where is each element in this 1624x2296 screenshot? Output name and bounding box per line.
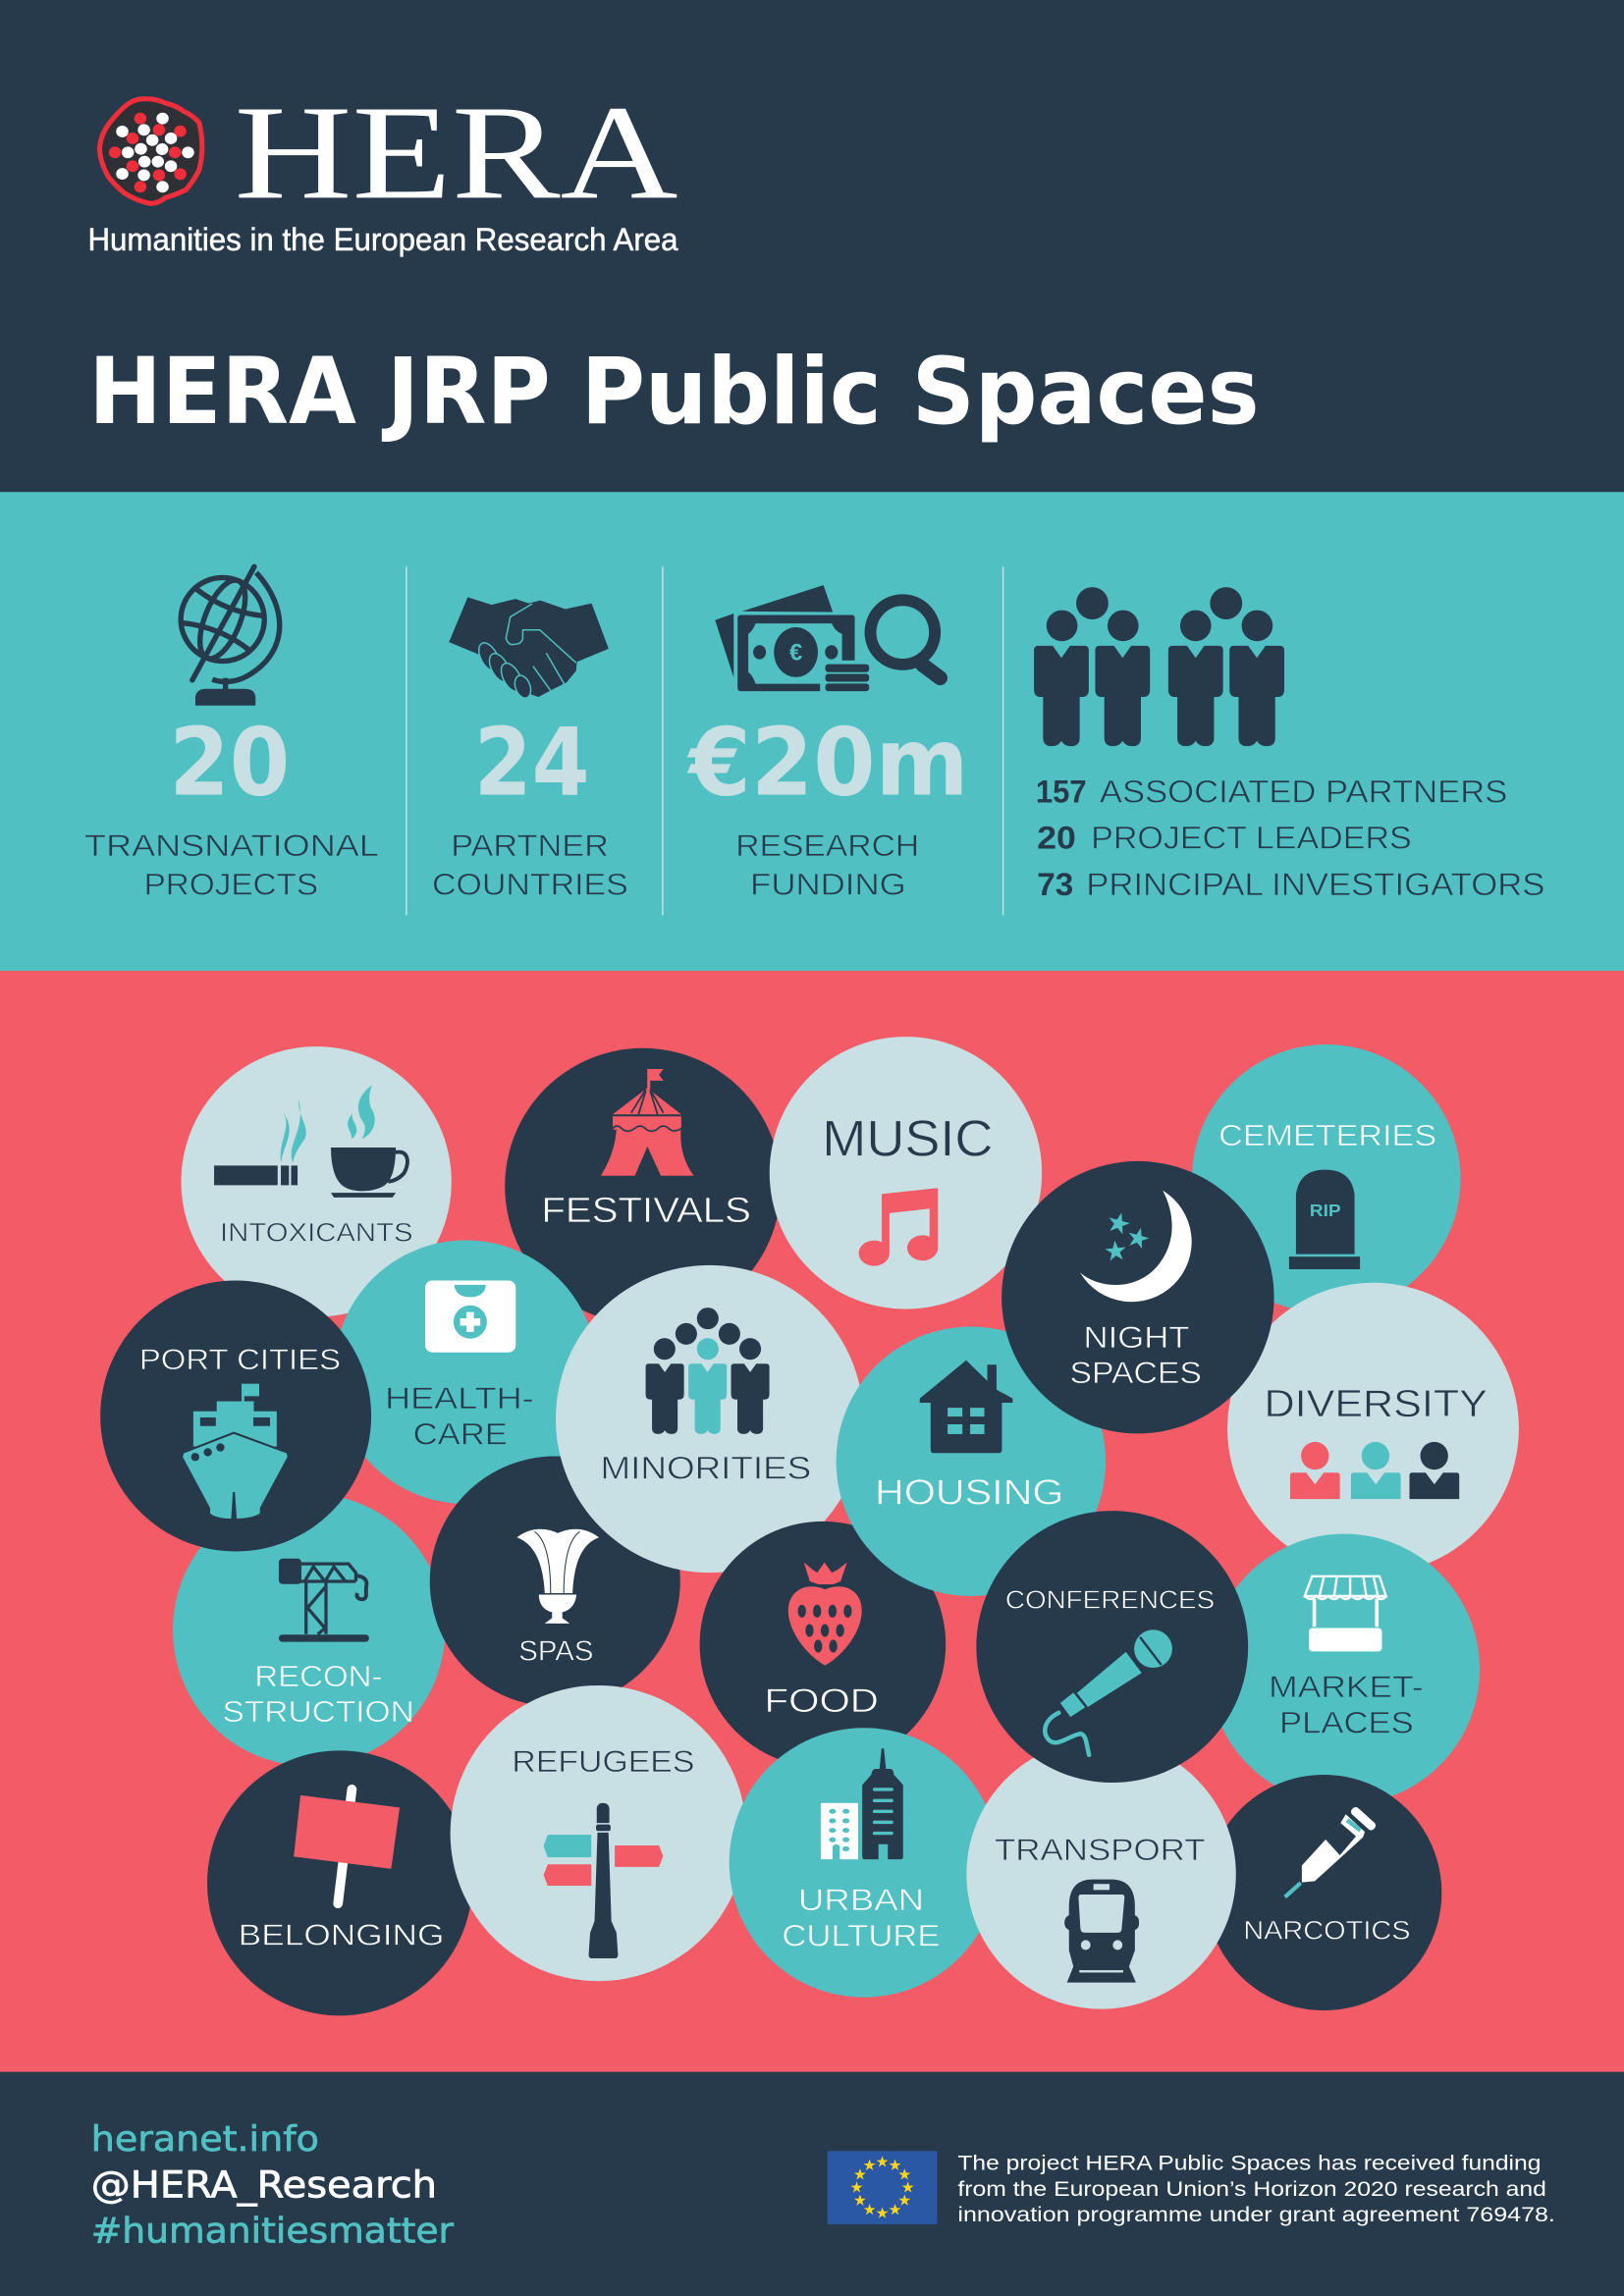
icon: globe — [168, 565, 280, 706]
icon: banknotes and magnifier — [715, 585, 941, 693]
stat: 24 partner countries: COUNTRIES — [432, 866, 628, 901]
stat: 24 partner countries: PARTNER — [451, 828, 609, 863]
theme: healthcare — [334, 1240, 598, 1504]
text: funding acknowledgement: The project HERA Public Spaces has received funding — [957, 2150, 1541, 2174]
stat: 20 transnational projects: 20 — [169, 707, 290, 817]
theme: food: FOOD — [765, 1682, 879, 1720]
stat: 24 partner countries: 24 — [474, 707, 590, 817]
theme: night spaces: SPACES — [1069, 1356, 1202, 1390]
theme: narcotics — [1206, 1775, 1441, 2010]
theme: music — [770, 1037, 1042, 1309]
theme: refugees — [451, 1685, 746, 1981]
theme: minorities — [556, 1265, 863, 1573]
theme: conferences — [976, 1511, 1248, 1783]
stats list: people: ASSOCIATED PARTNERS — [1100, 774, 1507, 809]
theme: marketplaces — [1209, 1534, 1480, 1805]
stats list: people: PROJECT LEADERS — [1091, 821, 1412, 856]
theme: festivals: FESTIVALS — [541, 1190, 751, 1230]
theme: belonging — [207, 1750, 472, 2015]
theme: reconstruction: STRUCTION — [223, 1695, 414, 1729]
theme: urban culture — [730, 1728, 999, 1998]
theme: spas: SPAS — [518, 1635, 593, 1667]
icon: handshake — [449, 597, 609, 700]
text: funding acknowledgement: from the European Union’s Horizon 2020 research and — [957, 2176, 1546, 2201]
text: funding acknowledgement: innovation programme under grant agreement 769478. — [957, 2202, 1555, 2226]
stat: 20m research funding: RESEARCH — [735, 828, 919, 863]
theme: port cities — [100, 1280, 371, 1551]
theme: transport: TRANSPORT — [995, 1833, 1206, 1867]
link: website: heranet.info — [91, 2119, 319, 2160]
theme: music: MUSIC — [822, 1111, 993, 1168]
theme: minorities: MINORITIES — [600, 1450, 811, 1485]
panel: key figures — [0, 492, 1624, 971]
stats list: people: 20 — [1037, 821, 1076, 856]
link: hashtag: #humanitiesmatter — [91, 2211, 454, 2251]
theme: transport — [966, 1739, 1236, 2009]
theme: reconstruction — [173, 1494, 445, 1766]
theme: cemeteries — [1192, 1044, 1461, 1313]
stat: 20m research funding — [687, 707, 968, 901]
theme: housing — [837, 1326, 1106, 1596]
text: funding acknowledgement — [957, 2150, 1555, 2226]
link: twitter handle: @HERA_Research — [91, 2163, 437, 2207]
stat: 24 partner countries — [432, 707, 628, 901]
theme: belonging: BELONGING — [239, 1919, 445, 1952]
theme: festivals — [505, 1048, 781, 1324]
icon: banknotes and magnifier: € — [789, 640, 802, 667]
theme: food — [700, 1522, 946, 1767]
stat: 20m research funding: FUNDING — [750, 866, 906, 901]
icon: EU flag — [828, 2151, 938, 2224]
stat: 20 transnational projects: TRANSNATIONAL — [84, 828, 379, 863]
theme: diversity — [1227, 1283, 1519, 1575]
theme: night spaces — [1001, 1161, 1274, 1433]
panel: header band — [0, 0, 1624, 492]
stats list: people: 157 — [1036, 774, 1087, 809]
stats list: people — [1036, 774, 1544, 902]
theme: reconstruction: RECON- — [254, 1660, 383, 1693]
theme: spas — [430, 1457, 680, 1707]
theme: housing: HOUSING — [875, 1472, 1064, 1512]
logo: HERA — [87, 78, 678, 257]
stats list: people: PRINCIPAL INVESTIGATORS — [1086, 867, 1544, 902]
theme: cemeteries: RIP — [1310, 1201, 1341, 1220]
panel: research themes — [0, 971, 1624, 2072]
theme: healthcare: HEALTH- — [385, 1381, 534, 1415]
theme: urban culture: URBAN — [798, 1883, 924, 1917]
theme: conferences: CONFERENCES — [1005, 1584, 1215, 1614]
title: HERA JRP Public Spaces — [88, 339, 1260, 446]
theme: night spaces: NIGHT — [1084, 1320, 1189, 1355]
logo tagline: Humanities in the European Research Area — [87, 221, 678, 257]
panel: footer — [0, 2072, 1624, 2296]
stats list: people: 73 — [1037, 867, 1073, 902]
theme: urban culture: CULTURE — [782, 1918, 941, 1952]
icon: HERA pomegranate emblem — [99, 99, 202, 203]
theme: intoxicants: INTOXICANTS — [220, 1217, 413, 1248]
stat: 20 transnational projects: PROJECTS — [144, 866, 318, 901]
stat: 20 transnational projects — [84, 707, 379, 901]
theme: port cities: PORT CITIES — [139, 1344, 341, 1376]
theme: marketplaces: MARKET- — [1269, 1670, 1424, 1704]
theme: intoxicants — [181, 1046, 452, 1316]
theme: refugees: REFUGEES — [512, 1744, 694, 1779]
logo wordmark: HERA — [235, 78, 678, 227]
theme: diversity: DIVERSITY — [1265, 1383, 1488, 1425]
theme: healthcare: CARE — [413, 1416, 508, 1451]
stat: 20m research funding: €20m — [687, 707, 968, 817]
theme: marketplaces: PLACES — [1279, 1705, 1414, 1739]
icon: groups of people — [1034, 587, 1284, 746]
theme: cemeteries: CEMETERIES — [1218, 1119, 1436, 1152]
theme: narcotics: NARCOTICS — [1243, 1915, 1411, 1945]
